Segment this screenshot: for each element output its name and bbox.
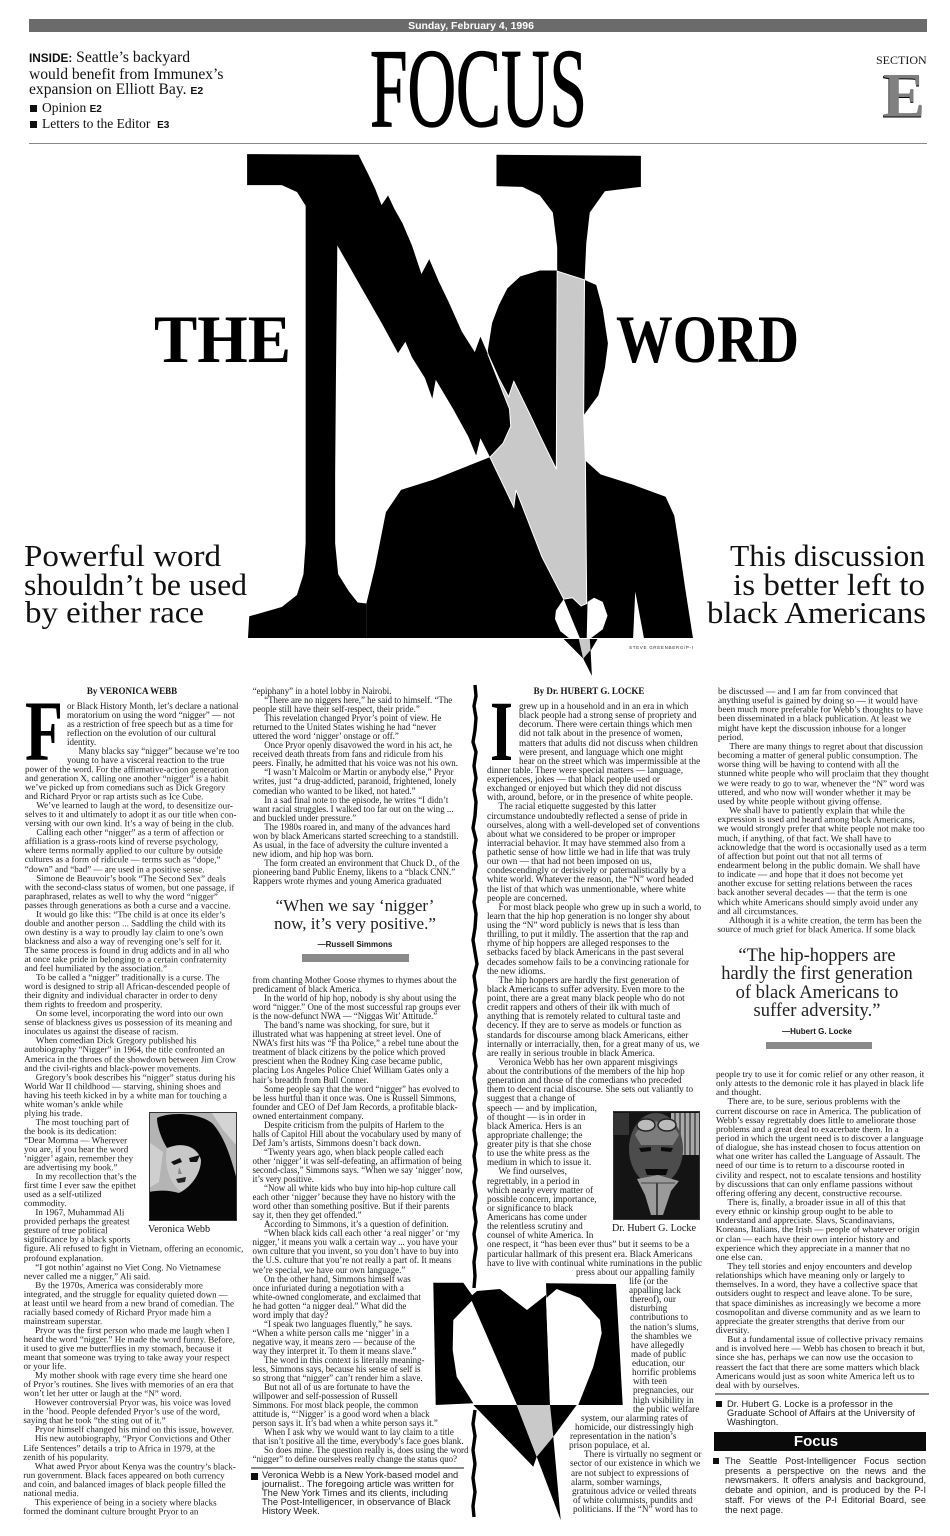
description text: The Seattle Post-Intelligencer Focus section <box>725 1456 926 1466</box>
small heart <box>555 598 608 676</box>
subhead right: is better left to <box>733 567 925 602</box>
inside headline: would benefit from Immunex’s <box>29 66 223 82</box>
quote attribution: —Russell Simmons <box>318 940 392 949</box>
quote text: hardly the first generation <box>721 964 913 984</box>
quote text: of black Americans to <box>736 983 898 1003</box>
masthead <box>29 19 927 144</box>
date bar <box>29 19 927 32</box>
author note: Hubert G. Locke <box>715 1393 929 1427</box>
article text, upper part: be discussed — and I am far from convinced that anything useful is gained by doing so — it would have been much more preferable for Webb’s thoughts to have been disseminated in a black publication. At least we might have kept the discussion inhouse for a longer period. There are many things to regret about that discussion becoming a matter of general public consumption. The worse thing will be having to contend with all the stunned white people who will proclaim that they thought we were ready to go to war, whenever the “N” word was uttered, and who now will wonder whether it may be used by white people without giving offense. We shall have to patiently explain that while the expression is used and heard among black Americans, we would strongly prefer that white people not make too much, if anything, of that fact. We shall have to acknowledge that the word is occasionally used as a term of affection but point out that not all terms of endearment belong in the public domain. We shall have to indicate — and hope that it does not become yet another excuse for setting relations between the races back another several decades — that the term is one which white Americans should simply avoid under any and all circumstances. Although it is a white creation, the term has been the source of much grief for black America. If some black <box>717 686 928 935</box>
note square <box>251 1473 258 1480</box>
quote text: suffer adversity.” <box>754 1001 880 1021</box>
quote bar <box>766 1042 872 1049</box>
subhead left: by either race <box>25 594 204 630</box>
quote text: “When we say ‘nigger’ <box>276 896 434 915</box>
note text: Dr. Hubert G. Locke is a professor in the Graduate School of Affairs at the University of Washington. <box>727 1398 915 1426</box>
description text: staff. For views of the P-I Editorial Board, see <box>725 1495 926 1505</box>
jagged column divider <box>473 685 477 1517</box>
section label <box>876 53 927 120</box>
caption: Veronica Webb: Veronica Webb <box>148 1224 210 1235</box>
large heart <box>433 1283 623 1520</box>
column 1: Veronica Webb article <box>23 686 243 1517</box>
column 4: Locke article continued <box>713 686 929 1515</box>
column 3: Hubert Locke article <box>487 686 702 1514</box>
opinion item: Opinion E2 <box>42 100 102 115</box>
date text: Sunday, February 4, 1996 <box>408 20 534 32</box>
illustration credit: STEVE GREENBERG/P-I <box>629 645 693 650</box>
masthead rule <box>29 143 927 144</box>
subhead left: shouldn’t be used <box>24 567 248 602</box>
letters item: Letters to the Editor E3 <box>42 116 169 131</box>
man silhouette <box>366 271 693 638</box>
photo: Dr. Hubert G. Locke <box>613 1111 700 1220</box>
quote text: now, it’s very positive.” <box>274 914 436 933</box>
byline: By Dr. HUBERT G. LOCKE <box>534 686 644 696</box>
article text: power of the word. For the affirmative-action generation and generation X, calling one another “nigger” is a habit we’ve picked up from comedians such as Dick Gregory and Richard Pryor or rap artists such as Ice Cube. We’ve learned to laugh at the word, to desensitize our- selves to it and ultimately to adopt it as our title when con- versing with our own kind. It’s a way of being in the club. Calling each other “nigger” as a term of affection or affiliation is a grass-roots kind of reverse psychology, where terms normally applied to our culture by outside cultures as a form of ridicule — terms such as “dope,” “down” and “bad” — are used in a positive sense. Simone de Beauvoir’s book “The Second Sex” deals with the second-class status of women, but one passage, if paraphrased, relates as well to why the word “nigger” passes through generations as both a curse and a vaccine. It would go like this: “The child is at once its elder’s double and another person ... Saddling the child with its own destiny is a way to proudly lay claim to one’s own blackness and also a way of revenging one’s self for it. The same process is found in drug addicts and in all who at once take pride in belonging to a certain confraternity and feel humiliated by the association.” To be called a “nigger” traditionally is a curse. The word is designed to strip all African-descended people of their dignity and individual character in order to deny them rights to freedom and prosperity. On some level, incorporating the word into our own sense of blackness gives us possession of its meaning and inoculates us against the disease of racism. When comedian Dick Gregory published his autobiography “Nigger” in 1964, the title confronted an America in the throes of the showdown between Jim Crow and the civil-rights and black-power movements. Gregory’s book describes his “nigger” status during his World War II childhood — starving, shining shoes and having his teeth kicked in by a white man for touching a white woman’s ankle while plying his trade. The most touching part of the book is its dedication: “Dear Momma — Wherever you are, if you hear the word ‘nigger’ again, remember they are advertising my book.” In my recollection that’s the first time I ever saw the epithet used as a self-utilized commodity. In 1967, Muhammad Ali provided perhaps the greatest gesture of true political significance by a black sports figure. Ali refused to fight in Vietnam, offering an economic, profound explanation. “I got nothin’ against no Viet Cong. No Vietnamese never called me a nigger,” Ali said. By the 1970s, America was considerably more integrated, and the struggle for equality quieted down — at least until we heard from a new brand of comedian. The racially based comedy of Richard Pryor made him a mainstream superstar. Pryor was the first person who made me laugh when I heard the word “nigger.” He made the word funny. Before, it used to give me butterflies in my stomach, because it meant that someone was trying to take away your respect or your life. My mother shook with rage every time she heard one of Pryor’s routines. She lives with memories of an era that won’t let her utter or laugh at the “N” word. However controversial Pryor was, his voice was loved in the ’hood. People defended Pryor’s use of the word, saying that he took “the sting out of it.” Pryor himself changed his mind on this issue, however. His new autobiography, “Pryor Convictions and Other Life Sentences” details a trip to Africa in 1979, at the zenith of his popularity. What awed Pryor about Kenya was the country’s black- run government. Black faces appeared on both currency and coin, and balanced images of black people filled the national media. This experience of being in a society where blacks formed the dominant culture brought Pryor to an <box>23 764 243 1517</box>
banner title: Focus <box>794 1433 838 1450</box>
article text beside drop cap: or Black History Month, let’s declare a national moratorium on using the word “nigger” — not as a restriction of free speech but as a time for reflection on the evolution of our cultural identity. Many blacks say “nigger” because we’re too young to have a visceral reaction to the true <box>67 701 239 765</box>
note rule <box>715 1393 929 1394</box>
letter N left stem and diagonal <box>247 154 511 638</box>
subhead left <box>24 538 248 630</box>
inside headline <box>29 49 223 98</box>
article text beside drop cap: grew up in a household and in an era in which black people had a strong sense of propriety and decorum. There were certain things which men did not talk about in the presence of women, matters that adults did not discuss when children were present, and language which one might hear on the street which was impermissible at the <box>519 701 700 766</box>
quote text <box>721 946 913 1021</box>
caption: Dr. Hubert G. Locke: Dr. Hubert G. Locke <box>612 1223 696 1234</box>
column 2: Webb article continued <box>251 686 468 1516</box>
description text <box>725 1456 926 1515</box>
quote attribution: —Hubert G. Locke <box>782 1027 852 1036</box>
pull quote: Hubert G. Locke <box>721 946 913 1049</box>
pull quote: Russell Simmons <box>274 896 436 962</box>
Focus section description <box>713 1456 926 1515</box>
arm gap <box>633 591 644 638</box>
subhead left: Powerful word <box>24 538 222 573</box>
letter N right stem <box>496 155 641 282</box>
note rule <box>251 1467 464 1468</box>
Focus banner <box>714 1432 926 1451</box>
description square <box>713 1458 719 1464</box>
description text: the next page. <box>725 1505 783 1515</box>
illustration: N with silhouette and lightning <box>247 154 693 676</box>
article text, upper part: “epiphany” in a hotel lobby in Nairobi. “There are no niggers here,” he said to himself. “The people still have their self-respect, their pride.” This revelation changed Pryor’s point of view. He returned to the United States wishing he had “never uttered the word ‘nigger’ onstage or off.” Once Pryor openly disavowed the word in his act, he received death threats from fans and ridicule from his peers. Finally, he admitted that his voice was not his own. “I wasn’t Malcolm or Martin or anybody else,” Pryor writes, just “a drug-addicted, paranoid, frightened, lonely comedian who wanted to be liked, not hated.” In a sad final note to the episode, he writes “I didn’t want racial struggles. I walked too far out on the wing ... and buckled under pressure.” The 1980s roared in, and many of the advances hard won by black Americans started screeching to a standstill. As usual, in the face of adversity the culture invented a new idiom, and hip hop was born. The form created an environment that Chuck D., of the pioneering band Public Enemy, likens to a “black CNN.” Rappers wrote rhymes and young America graduated <box>253 686 460 886</box>
note text: Veronica Webb is a New York-based model and journalist.. The foregoing article was written for The New York Times and its clients, including The Post-Intelligencer, in observance of Black History Week. <box>262 1470 458 1516</box>
inside teaser <box>29 49 223 131</box>
subhead right: black Americans <box>707 595 926 630</box>
headline: WORD: WORD <box>616 301 799 377</box>
quote bar <box>302 954 409 962</box>
inside headline: expansion on Elliott Bay. E2 <box>29 81 203 98</box>
headline: THE: THE <box>154 301 291 377</box>
column divider and large heart <box>433 684 623 1520</box>
inside headline: INSIDE: Seattle’s backyard <box>29 49 190 66</box>
description text: newsmakers. It offers analysis and background, <box>725 1475 926 1485</box>
byline: By VERONICA WEBB <box>87 686 177 696</box>
article text, lower part: from chanting Mother Goose rhymes to rhymes about the predicament of black America. In the world of hip hop, nobody is shy about using the word “nigger.” One of the most successful rap groups ever is the now-defunct NWA — “Niggas Wit’ Attitude.” The band’s name was shocking, for sure, but it illustrated what was happening at street level. One of NWA’s first hits was “F tha Police,” a rebel tune about the treatment of black citizens by the police which proved prescient when the Rodney King case became public, placing Los Angeles Police Chief William Gates only a hair’s breadth from Bull Conner. Some people say that the word “nigger” has evolved to be less hurtful than it once was. One is Russell Simmons, founder and CEO of Def Jam Records, a profitable black- owned entertainment company. Despite criticism from the pulpits of Harlem to the halls of Capitol Hill about the vocabulary used by many of Def Jam’s artists, Simmons doesn’t back down. “Twenty years ago, when black people called each other ‘nigger’ it was self-defeating, an affirmation of being second-class,” Simmons says. “When we say ‘nigger’ now, it’s very positive. “Now all white kids who buy into hip-hop culture call each other ‘nigger’ because they have no history with the word other than something positive. But if their parents say it, then they get offended.” According to Simmons, it’s a question of definition. “When black kids call each other ‘a real nigger’ or ‘my nigger,’ it means you walk a certain way ... you have your own culture that you invent, so you don’t have to buy into the U.S. culture that you’re not really a part of. It means we’re special, we have our own language.” On the other hand, Simmons himself was once infuriated during a negotiation with a white-owned conglomerate, and exclaimed that he had gotten “a nigger deal.” What did the word imply that day? “I speak two languages fluently,” he says. “When a white person calls me ‘nigger’ in a negative way, it means zero — because of the way they interpret it. To them it means slave.” The word in this context is literally meaning- less, Simmons says, because his sense of self is so strong that “nigger” can’t render him a slave. But not all of us are fortunate to have the willpower and self-possession of Russell Simmons. For most black people, the common attitude is, “‘Nigger’ is a good word when a black person says it. It’s bad when a white person says it.” When I ask why we would want to lay claim to a title that isn’t positive all the time, everybody’s face goes blank. So does mine. The question really is, does using the word “nigger” to define ourselves really change the status quo? <box>252 975 468 1464</box>
quote text <box>274 896 436 933</box>
subhead right: This discussion <box>730 538 926 573</box>
quote text: “The hip-hoppers are <box>738 946 896 966</box>
subhead right <box>707 538 926 630</box>
section word: SECTION <box>876 53 927 67</box>
gray lightning bolt <box>488 271 587 606</box>
headline illustration <box>24 154 926 676</box>
description text: debate and opinion, and is produced by the P-I <box>725 1485 926 1495</box>
photo: Veronica Webb <box>149 1112 237 1221</box>
description text: presents a perspective on the news and the <box>725 1466 926 1476</box>
note square <box>716 1401 722 1407</box>
article text, lower part: people try to use it for comic relief or any other reason, it only attests to the demonic role it has played in black life and thought. There are, to be sure, serious problems with the current discourse on race in America. The publication of Webb’s essay regrettably does little to ameliorate those problems and a great deal to exacerbate them. In a period in which the urgent need is to discover a language of dialogue, she has instead chosen to focus attention on what one writer has called the Language of Assault. The need of our time is to return to a discourse rooted in civility and respect, not to escalate tensions and hostility by discussions that can only enflame passions without offering offering any decent, constructive recourse. There is, finally, a broader issue in all of this that every ethnic or kinship group ought to be able to understand and appreciate. Slavs, Scandinavians, Koreans, Italians, the Irish — people of whatever origin or clan — each have their own interior history and experience which they appreciate in a manner that no one else can. They tell stories and enjoy encounters and develop relationships which have meaning only or largely to themselves. In a word, they have a collective space that outsiders ought to respect and leave alone. To be sure, that space diminishes as increasingly we become a more cosmopolitan and diverse community and as we learn to appreciate the greater strengths that derive from our diversity. But a fundamental issue of collective privacy remains and is involved here — Webb has chosen to breach it but, since she has, perhaps we can now use the occasion to reassert the fact that there are some matters which black Americans would just as soon white America left us to deal with by ourselves. <box>716 1068 925 1389</box>
author note: Veronica Webb <box>251 1467 464 1516</box>
article text wrapping around photo and heart: dinner table. There were special matters — language, experiences, jokes — that black people used or exchanged or enjoyed but which they did not discuss with, around, before, or in the presence of white people. The racial etiquette suggested by this latter circumstance undoubtedly reflected a sense of pride in ourselves, along with a well-developed set of conventions about what we considered to be proper or improper interracial behavior. It may have stemmed also from a pathetic sense of how little we had in life that was truly our own — that had not been imposed on us, condescendingly or derisively or paternalistically by a white world. Whatever the reason, the “N” word headed the list of that which was unmentionable, where white people are concerned. For most black people who grew up in such a world, to learn that the hip hop generation is no longer shy about using the “N” word publicly is news that is less than thrilling, to put it mildly. The assertion that the rap and rhyme of hip hoppers are alleged responses to the setbacks faced by black Americans in the past several decades somehow fails to be a convincing rationale for the new idioms. The hip hoppers are hardly the first generation of black Americans to suffer adversity. Even more to the point, there are a great many black people who do not credit rappers and others of their ilk with much of anything that is remotely related to cultural taste and decency. If they are to serve as models or function as standards for discourse among black Americans, either internally or interracially, then, for a great many of us, we are really in serious trouble in black America. Veronica Webb has her own apparent misgivings about the contributions of the members of the hip hop generation and those of the comedians who preceded them to decent racial discourse. She sets out valiantly to suggest that a change of speech — and by implication, of thought — is in order in black America. Hers is an appropriate challenge; the greater pity is that she chose to use the white press as the medium in which to issue it. We find ourselves, regrettably, in a period in which nearly every matter of possible concern, importance, or significance to black Americans has come under the relentless scrutiny and counsel of white America. In one respect, it “has been ever thus” but it seems to be a particular hallmark of this present era. Black Americans have to live with continual white ruminations in the public press about our appalling family life (or the appalling lack thereof), our disturbing contributions to the nation’s slums, the shambles we have allegedly made of public education, our horrific problems with teen pregnancies, our high visibility in the public welfare system, our alarming rates of homicide, our distressingly high representation in the nation’s prison populace, et al. There is virtually no segment or sector of our existence in which we are not subject to expressions of alarm, somber warnings, gratuitous advice or veiled threats of white columnists, pundits and politicians. If the “N” word has to <box>487 765 702 1514</box>
